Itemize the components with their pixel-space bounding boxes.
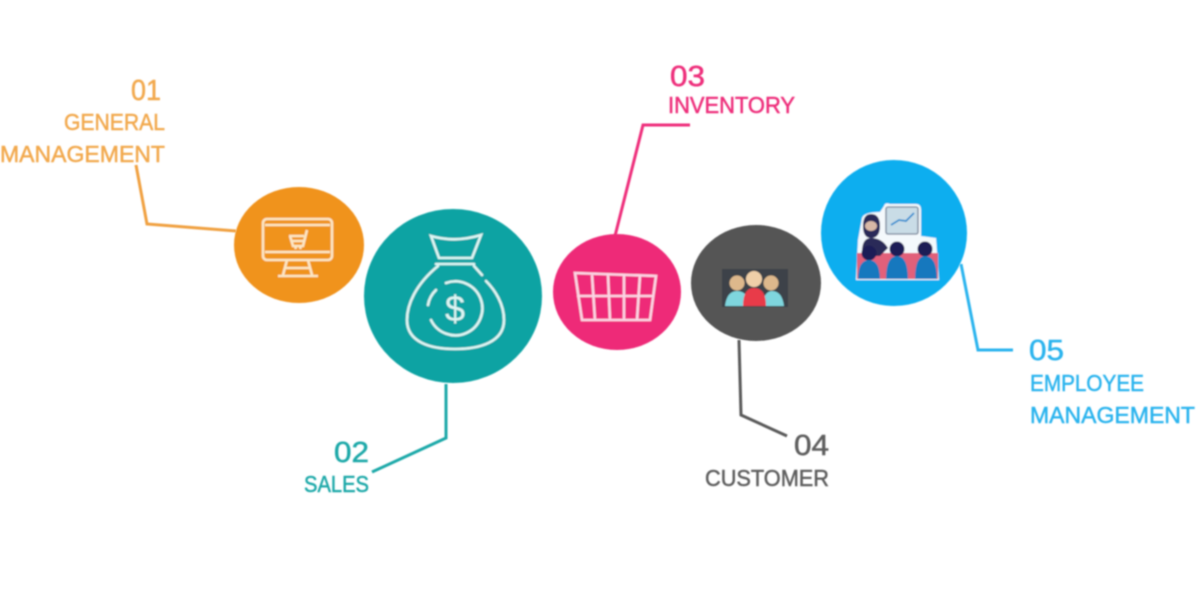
circle: employee management [821,160,967,306]
label: 04 customer: CUSTOMER [705,465,829,491]
connector: employee management [961,264,1013,350]
connector: sales [372,384,446,472]
label: 04 customer [705,430,829,491]
circle: sales [364,209,542,383]
label: 03 inventory [668,61,795,118]
label: 02 sales: SALES [304,471,369,497]
connector: general management [136,165,236,231]
connector: customer [739,340,787,436]
icon: customers group [722,269,788,307]
label: 05 employee management: EMPLOYEE [1030,370,1144,396]
icon: money bag [407,235,504,349]
label: 03 inventory: INVENTORY [668,92,795,118]
icon: basket [575,273,656,320]
icon: presentation [856,203,939,280]
circle: general management [234,187,364,303]
icon: monitor with cart [263,219,332,276]
label: 03 inventory: 03 [670,61,705,93]
label: 05 employee management: MANAGEMENT [1030,402,1195,428]
label: 02 sales [304,437,369,497]
label: 05 employee management: 05 [1029,335,1064,367]
icon: dollar sign: $ [445,288,465,329]
label: 01 general management: GENERAL [64,109,165,135]
circle: customer [691,225,821,341]
connector: inventory [615,125,690,236]
label: 02 sales: 02 [334,437,369,469]
label: 01 general management: MANAGEMENT [0,141,165,167]
label: 01 general management: 01 [131,75,161,107]
label: 04 customer: 04 [794,430,829,462]
label: 05 employee management [1029,335,1195,428]
label: 01 general management [0,75,165,167]
circle: inventory [553,234,681,350]
